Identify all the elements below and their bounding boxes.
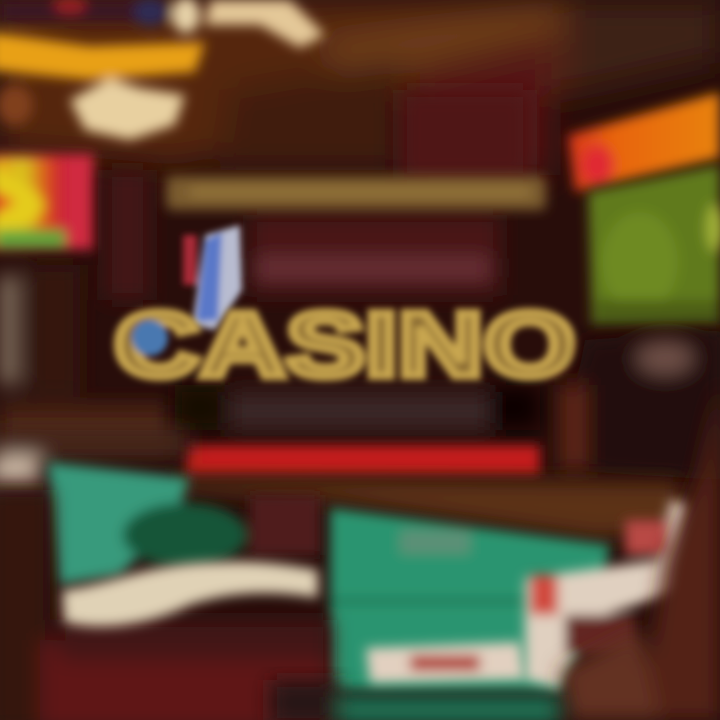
right green table [330, 508, 610, 690]
right dark cabinet [560, 330, 720, 480]
green screen [588, 165, 720, 325]
casino title: CASINO [114, 294, 576, 396]
blue and white emblem [183, 225, 242, 330]
left wall column [0, 170, 170, 450]
bottom green felt [270, 680, 560, 720]
chips and right table edge [525, 500, 690, 690]
wooden ceiling [0, 0, 720, 175]
left neon sign [0, 154, 94, 250]
orange banner [568, 92, 720, 192]
right sign and screen [568, 92, 720, 325]
red bar strip [186, 445, 540, 475]
left green table [48, 462, 320, 585]
gold top sign band [166, 176, 546, 210]
floor and table rail [0, 430, 680, 538]
white table edge [62, 562, 525, 684]
foreground hand [560, 380, 720, 720]
left chair and cushion [0, 490, 330, 720]
ceiling lights [0, 0, 325, 140]
red curtain panels [175, 90, 540, 430]
